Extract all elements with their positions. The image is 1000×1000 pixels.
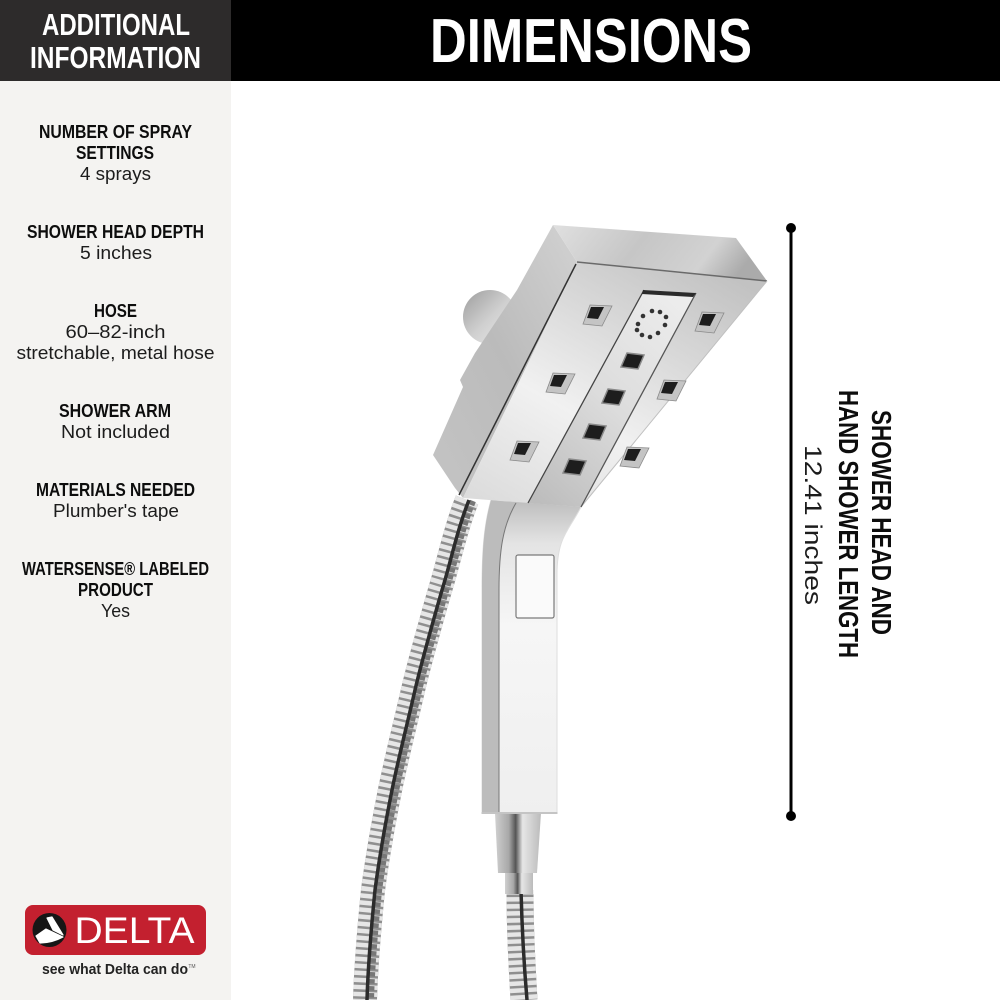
spec: shower arm: SHOWER ARM [59, 400, 171, 421]
logo: delta: see what Delta can do [42, 961, 188, 978]
right hose [520, 890, 527, 1000]
spec: shower arm: Not included [61, 421, 170, 442]
spec: number of spray settings: SETTINGS [76, 142, 154, 163]
dimension line [786, 223, 796, 821]
handle button [516, 555, 554, 618]
spec: hose: 60–82-inch [66, 321, 166, 342]
center strip [528, 290, 696, 507]
spec: watersense labeled product: Yes [101, 600, 130, 621]
spec: watersense labeled product [22, 558, 209, 621]
spec: materials needed [36, 479, 195, 521]
spec: materials needed: MATERIALS NEEDED [36, 479, 195, 500]
icon: delta emblem [32, 913, 66, 947]
heading: additional information: ADDITIONAL [42, 7, 190, 42]
spec: number of spray settings: NUMBER OF SPRAY [39, 121, 193, 142]
front face [463, 262, 767, 507]
spec: shower head depth: SHOWER HEAD DEPTH [27, 221, 204, 242]
handle [482, 500, 582, 814]
logo: delta [25, 905, 206, 978]
logo: delta: DELTA [74, 910, 195, 951]
spray dots [635, 309, 668, 339]
spec: materials needed: Plumber's tape [53, 500, 179, 521]
nozzles: outer [510, 305, 724, 468]
spec: shower head depth [27, 221, 204, 263]
heading: additional information: INFORMATION [30, 40, 201, 75]
product: hand shower [365, 225, 767, 1000]
back plate and side [433, 225, 577, 498]
top face [553, 225, 767, 281]
spec: watersense labeled product: PRODUCT [78, 579, 154, 600]
spec: hose: HOSE [94, 300, 137, 321]
title: dimensions: DIMENSIONS [430, 7, 752, 76]
nozzles: center [563, 353, 644, 475]
nozzles: outer openings [514, 307, 716, 461]
spec: number of spray settings [39, 121, 193, 184]
dimension label [799, 390, 897, 658]
heading: additional information [0, 0, 231, 81]
dimension label: HAND SHOWER LENGTH [833, 390, 864, 658]
spec: watersense labeled product: WATERSENSE® LABELED [22, 558, 209, 579]
dimension label: 12.41 inches [799, 445, 826, 605]
hose collar and cone [495, 813, 541, 894]
spec: hose [16, 300, 214, 363]
panel: additional information [0, 81, 231, 1000]
spec: number of spray settings: 4 sprays [80, 163, 151, 184]
spec: shower head depth: 5 inches [80, 242, 152, 263]
logo: delta: TM [188, 964, 196, 970]
dimension label: SHOWER HEAD AND [866, 410, 897, 635]
header bar [0, 0, 1000, 81]
shower head [433, 225, 767, 507]
left hose [365, 500, 473, 1000]
spec: shower arm [59, 400, 171, 442]
spec: hose: stretchable, metal hose [16, 342, 214, 363]
mount disc [463, 290, 517, 344]
